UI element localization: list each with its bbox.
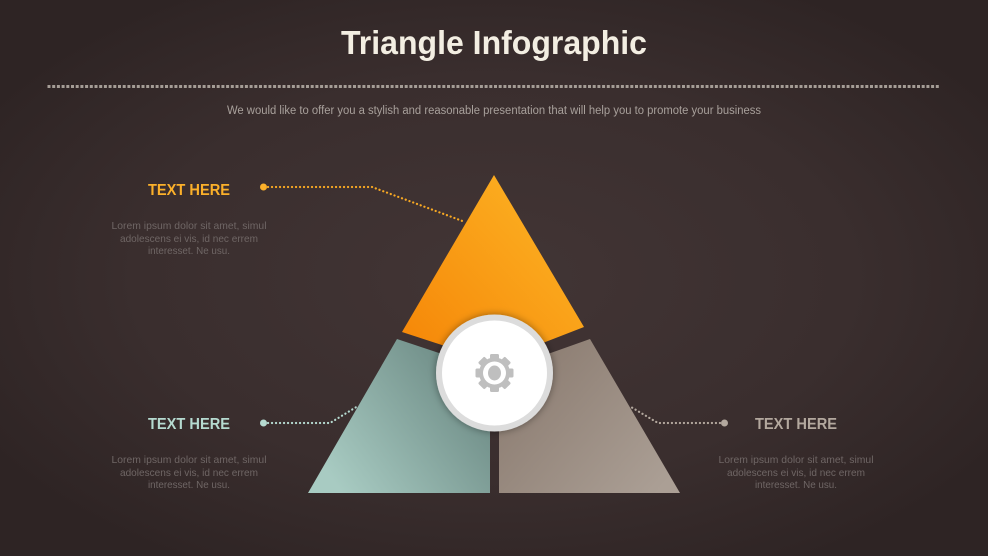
body text: teal: interesset. Ne usu. <box>148 479 230 491</box>
title: Triangle Infographic <box>341 24 647 61</box>
body text: taupe: Lorem ipsum dolor sit amet, simul <box>718 454 874 466</box>
body text: teal: adolescens ei vis, id nec errem <box>120 467 258 479</box>
heading: taupe: TEXT HERE <box>755 416 837 433</box>
segment: orange top <box>402 175 584 362</box>
connector: taupe <box>631 407 728 426</box>
body text: orange: Lorem ipsum dolor sit amet, simul <box>112 220 266 232</box>
heading: orange: TEXT HERE <box>148 182 230 199</box>
connector: orange <box>260 184 465 222</box>
label: orange block <box>112 182 266 257</box>
body text: orange: adolescens ei vis, id nec errem <box>120 233 258 245</box>
body text: taupe <box>718 454 874 491</box>
body text: teal <box>112 454 266 491</box>
center circle <box>436 314 553 432</box>
segment: taupe right <box>499 339 680 493</box>
subtitle: We would like to offer you a stylish and reasonable presentation that will help you to promote your business <box>227 105 761 117</box>
segment: teal left <box>308 339 490 493</box>
triangle diagram <box>308 175 680 493</box>
body text: orange <box>112 220 266 257</box>
icon: gear <box>476 354 514 392</box>
body text: orange: interesset. Ne usu. <box>148 245 230 257</box>
label: taupe block <box>718 416 874 491</box>
heading: teal: TEXT HERE <box>148 416 230 433</box>
label: teal block <box>112 416 266 491</box>
body text: taupe: interesset. Ne usu. <box>755 479 837 491</box>
connector: teal <box>260 406 358 426</box>
body text: teal: Lorem ipsum dolor sit amet, simul <box>112 454 266 466</box>
body text: taupe: adolescens ei vis, id nec errem <box>727 467 865 479</box>
